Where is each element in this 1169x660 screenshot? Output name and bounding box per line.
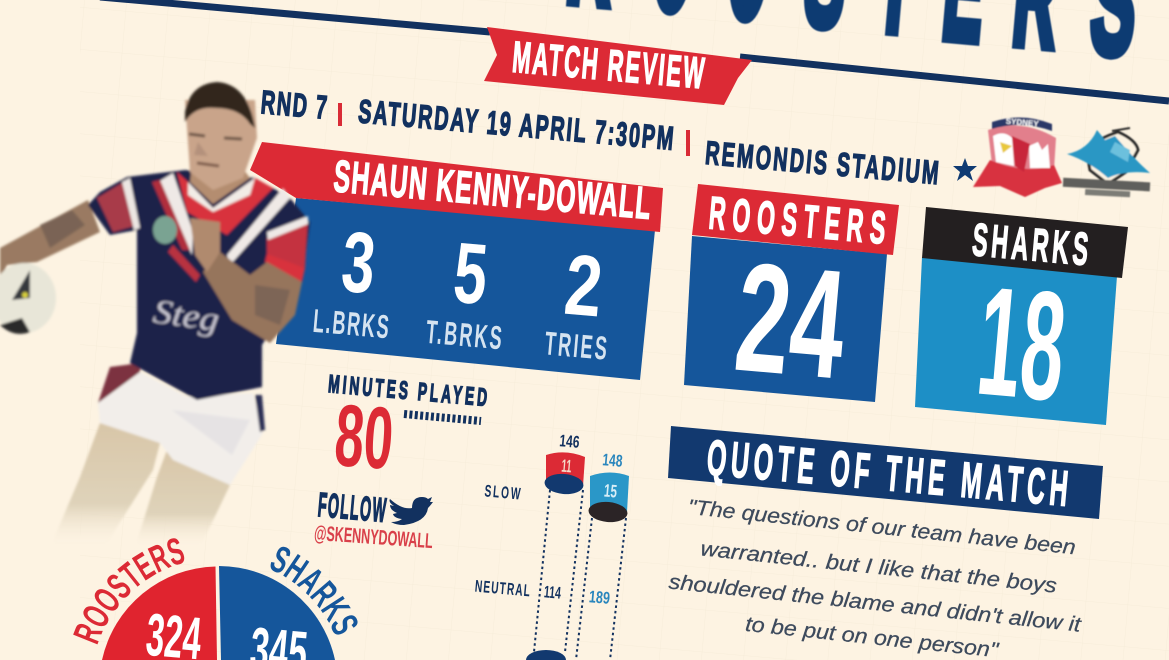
logo: Sharks — [1063, 128, 1150, 197]
quote heading: QUOTE OF THE MATCH — [705, 430, 1070, 517]
curved label: Sharks: SHARKS — [270, 546, 358, 635]
chart: possession cylinders: 189 — [588, 587, 611, 608]
ribbon: match review: MATCH REVIEW — [510, 34, 706, 98]
jersey — [88, 170, 310, 400]
stat: line breaks: 3 — [338, 214, 379, 312]
neck and head — [190, 165, 250, 204]
panel: player stats — [250, 142, 663, 380]
Sharks cylinder: 15 — [603, 480, 618, 502]
Roosters cylinder: 146 — [559, 431, 580, 452]
stat: tries: 2 — [561, 237, 606, 336]
stat: tackle breaks: 5 — [450, 225, 491, 323]
stat: line breaks: L.BRKS — [312, 302, 390, 346]
quote text: shouldered the blame and didn't allow it — [668, 570, 1083, 637]
right arm and fist — [203, 252, 302, 343]
panel: Sharks score — [915, 207, 1128, 434]
ribbon: match review — [484, 27, 752, 105]
title: ROOSTERS — [561, 0, 1144, 87]
chart: run metres pie — [73, 538, 358, 660]
dotted column outlines — [534, 490, 626, 660]
lower cylinder — [526, 650, 566, 660]
ball — [0, 263, 56, 333]
neutral values: 114 — [543, 582, 562, 603]
stats header — [250, 142, 663, 232]
quote text: to be put on one person" — [744, 613, 1001, 660]
panel: Sharks score: SHARKS — [970, 213, 1090, 275]
stat: tackle breaks: T.BRKS — [425, 313, 503, 357]
match info line: RND 7 — [259, 83, 329, 126]
stats header: SHAUN KENNY-DOWALL — [332, 150, 653, 229]
stat: tries: TRIES — [543, 325, 609, 367]
Sharks cylinder — [588, 450, 629, 524]
Roosters cylinder: 11 — [561, 456, 572, 476]
quote text — [668, 496, 1083, 660]
match info line: REMONDIS STADIUM — [704, 134, 940, 191]
logo: Roosters: SYDNEY — [1005, 117, 1040, 128]
Roosters cylinder — [544, 431, 585, 496]
left arm — [0, 200, 100, 280]
panel: Sharks score: 18 — [971, 254, 1072, 434]
panel: Roosters score: 24 — [729, 230, 852, 412]
twitter follow: @SKENNYDOWALL — [313, 521, 434, 553]
row labels: NEUTRAL — [474, 576, 531, 600]
quote text: "The questions of our team have been — [687, 496, 1077, 559]
row labels — [474, 481, 531, 600]
player photo — [0, 82, 310, 548]
minutes played: MINUTES PLAYED — [327, 371, 488, 412]
logo: Roosters — [973, 117, 1062, 197]
stat: tries — [543, 237, 609, 367]
panel: Roosters score — [684, 184, 899, 412]
stat: tackle breaks — [425, 225, 503, 357]
icon: twitter bird — [390, 497, 433, 525]
stats body — [276, 198, 655, 380]
Sharks cylinder: 148 — [602, 450, 623, 471]
header rule — [100, 0, 1169, 101]
match info line: SATURDAY 19 APRIL 7:30PM — [357, 92, 675, 157]
panel: quote of the match — [668, 426, 1103, 660]
quote text: warranted.. but I like that the boys — [699, 537, 1058, 598]
hatch bar — [404, 414, 481, 421]
badge — [153, 216, 177, 244]
legs — [50, 423, 160, 548]
panel: Roosters score: ROOSTERS — [707, 187, 888, 254]
match info line — [259, 83, 940, 191]
chart: possession cylinders — [474, 431, 629, 660]
stat: line breaks — [312, 214, 390, 346]
sponsor text: Steg — [151, 293, 221, 339]
icon: star — [953, 158, 977, 181]
shorts — [98, 372, 263, 485]
twitter follow: FOLLOW — [316, 485, 388, 530]
curved label: Roosters: ROOSTERS — [73, 538, 184, 644]
minutes played — [327, 371, 488, 488]
row labels: SLOW — [484, 481, 522, 503]
minutes played: 80 — [332, 385, 397, 488]
twitter follow — [313, 485, 434, 553]
